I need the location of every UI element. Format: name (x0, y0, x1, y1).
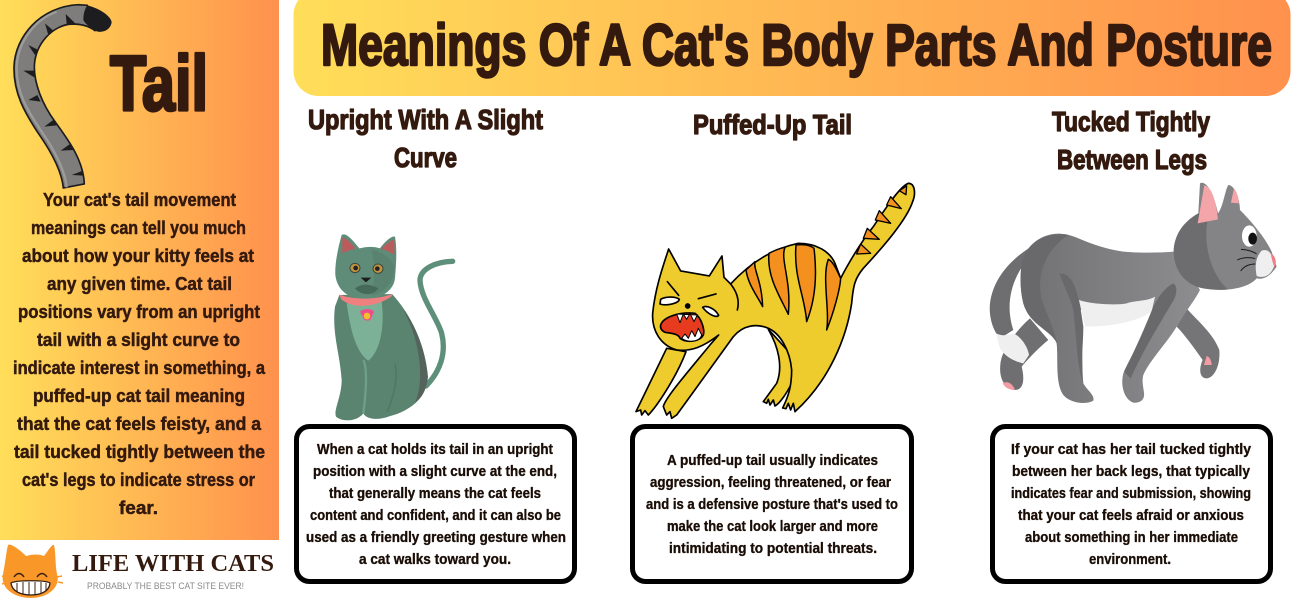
heading: tucked tightly between legs: Between Legs (1057, 144, 1207, 175)
callout: upright tail description (296, 426, 574, 582)
heading: upright with a slight curve: Curve (394, 142, 457, 173)
text block: tail description: about how your kitty feels at (22, 245, 254, 266)
illustration: angry yellow cat (636, 183, 914, 418)
heading: upright with a slight curve (308, 104, 543, 173)
text block: tail description: any given time. Cat tail (47, 273, 232, 294)
callout: upright tail description: content and confident, and it can also be (310, 507, 561, 524)
callout: upright tail description: used as a friendly greeting gesture when (306, 529, 566, 546)
callout: tucked tail description: between her back legs, that typically (1012, 463, 1251, 480)
callout: puffed-up tail description: and is a defensive posture that's used to (646, 496, 898, 513)
panel: tail sidebar (0, 0, 279, 540)
text block: tail description: positions vary from an upright (18, 301, 260, 322)
icon: grinning orange cat (2, 545, 63, 598)
icon: striped cat tail (14, 5, 112, 188)
callout: tucked tail description: about something in her immediate (1025, 529, 1238, 546)
text block: tail description: puffed-up cat tail meaning (33, 385, 245, 406)
heading: Tail: Tail (110, 39, 208, 127)
text block: tail description: indicate interest in something, a (13, 357, 266, 378)
callout: puffed-up tail description: A puffed-up tail usually indicates (667, 452, 878, 469)
heading: puffed-up tail: Puffed-Up Tail (693, 109, 852, 140)
callout: tucked tail description: If your cat has her tail tucked tightly (1011, 441, 1252, 458)
callout: tucked tail description: that your cat feels afraid or anxious (1018, 507, 1244, 524)
callout: upright tail description: position with a slight curve at the end, (313, 463, 557, 480)
callout: puffed-up tail description: intimidating to potential threats. (669, 540, 877, 557)
column: upright tail (296, 104, 574, 582)
callout: tucked tail description: environment. (1089, 551, 1171, 568)
header banner (294, 0, 1290, 96)
callout: puffed-up tail description: aggression, feeling threatened, or fear (650, 474, 891, 491)
text block: tail description: cat's legs to indicate stress or (22, 469, 255, 490)
text block: tail description: tail tucked tightly between the (14, 441, 265, 462)
callout: upright tail description: that generally means the cat feels (329, 485, 541, 502)
callout: upright tail description: a cat walks toward you. (359, 551, 511, 568)
illustration: grey walking cat (990, 183, 1277, 403)
text block: tail description: Your cat's tail movement (43, 189, 236, 210)
heading: tucked tightly between legs: Tucked Tightly (1052, 106, 1210, 137)
column: puffed-up tail (632, 109, 914, 582)
illustration: green sitting cat (334, 234, 453, 420)
text block: tail description: that the cat feels feisty, and a (17, 413, 262, 434)
logo: Life With Cats (2, 545, 274, 598)
text block: tail description: fear. (119, 497, 158, 518)
callout: puffed-up tail description: make the cat look larger and more (667, 518, 878, 535)
callout: tucked tail description (992, 426, 1270, 582)
logo: Life With Cats: PROBABLY THE BEST CAT SITE EVER! (87, 581, 244, 592)
text block: tail description: meanings can tell you much (31, 217, 246, 238)
text block: tail description (13, 189, 266, 518)
text block: tail description: tail with a slight curve to (37, 329, 240, 350)
heading: upright with a slight curve: Upright With A Slight (308, 104, 543, 135)
callout: tucked tail description: indicates fear and submission, showing (1011, 485, 1251, 502)
column: tucked tail (990, 106, 1277, 582)
heading: tucked tightly between legs (1052, 106, 1210, 175)
callout: upright tail description: When a cat holds its tail in an upright (317, 441, 553, 458)
logo: Life With Cats: LIFE WITH CATS (72, 550, 274, 577)
callout: puffed-up tail description (632, 426, 912, 582)
